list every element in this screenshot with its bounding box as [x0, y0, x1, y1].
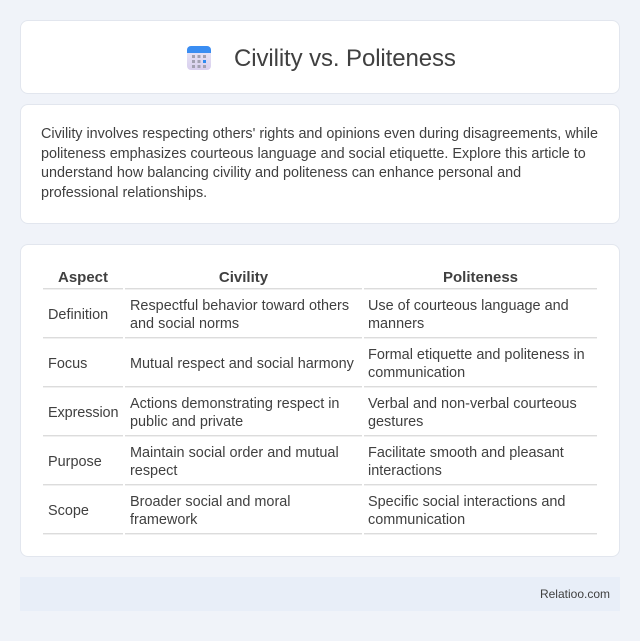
footer text: Relatioo.com	[540, 587, 610, 601]
row: definition: Use of courteous language and	[368, 298, 569, 314]
row: definition: Respectful behavior toward others	[130, 298, 349, 314]
row: scope: Broader social and moral	[130, 494, 290, 510]
row: definition: and social norms	[130, 316, 239, 332]
row: scope	[43, 494, 597, 535]
title: Civility vs. Politeness	[234, 45, 456, 72]
table header: Aspect	[58, 269, 108, 286]
row: purpose: interactions	[368, 463, 442, 479]
row: purpose: Maintain social order and mutual	[130, 445, 339, 461]
row: purpose: Purpose	[48, 454, 102, 470]
row: scope: Scope	[48, 503, 89, 519]
header panel	[20, 20, 620, 94]
table header: Politeness	[443, 269, 518, 286]
row: expression	[43, 396, 597, 437]
intro text: Civility involves respecting others' rights and opinions even during disagreements, while	[41, 126, 598, 142]
row: definition: Definition	[48, 307, 108, 323]
table header	[43, 269, 597, 290]
row: definition: manners	[368, 316, 424, 332]
row: focus: communication	[368, 365, 465, 381]
icon: calendar	[187, 46, 211, 70]
row: purpose: Facilitate smooth and pleasant	[368, 445, 564, 461]
row: purpose	[43, 445, 597, 486]
row: expression: Expression	[48, 405, 118, 421]
row: focus: Focus	[48, 356, 87, 372]
row: purpose: respect	[130, 463, 177, 479]
intro text: understand how balancing civility and politeness can enhance personal and	[41, 165, 521, 181]
row: expression: Actions demonstrating respect in	[130, 396, 339, 412]
row: scope: framework	[130, 512, 197, 528]
row: focus: Formal etiquette and politeness in	[368, 347, 585, 363]
row: expression: public and private	[130, 414, 243, 430]
intro text: professional relationships.	[41, 184, 207, 200]
row: scope: communication	[368, 512, 465, 528]
row: expression: Verbal and non-verbal courteous	[368, 396, 577, 412]
row: focus	[43, 347, 597, 388]
intro panel	[20, 104, 620, 224]
table panel	[20, 244, 620, 557]
footer bar	[20, 577, 620, 611]
row: scope: Specific social interactions and	[368, 494, 565, 510]
intro text	[41, 126, 598, 200]
table header: Civility	[219, 269, 268, 286]
row: expression: gestures	[368, 414, 423, 430]
row: definition	[43, 298, 597, 339]
intro text: politeness emphasizes courteous language and social etiquette. Explore this article to	[41, 146, 586, 162]
row: focus: Mutual respect and social harmony	[130, 356, 354, 372]
